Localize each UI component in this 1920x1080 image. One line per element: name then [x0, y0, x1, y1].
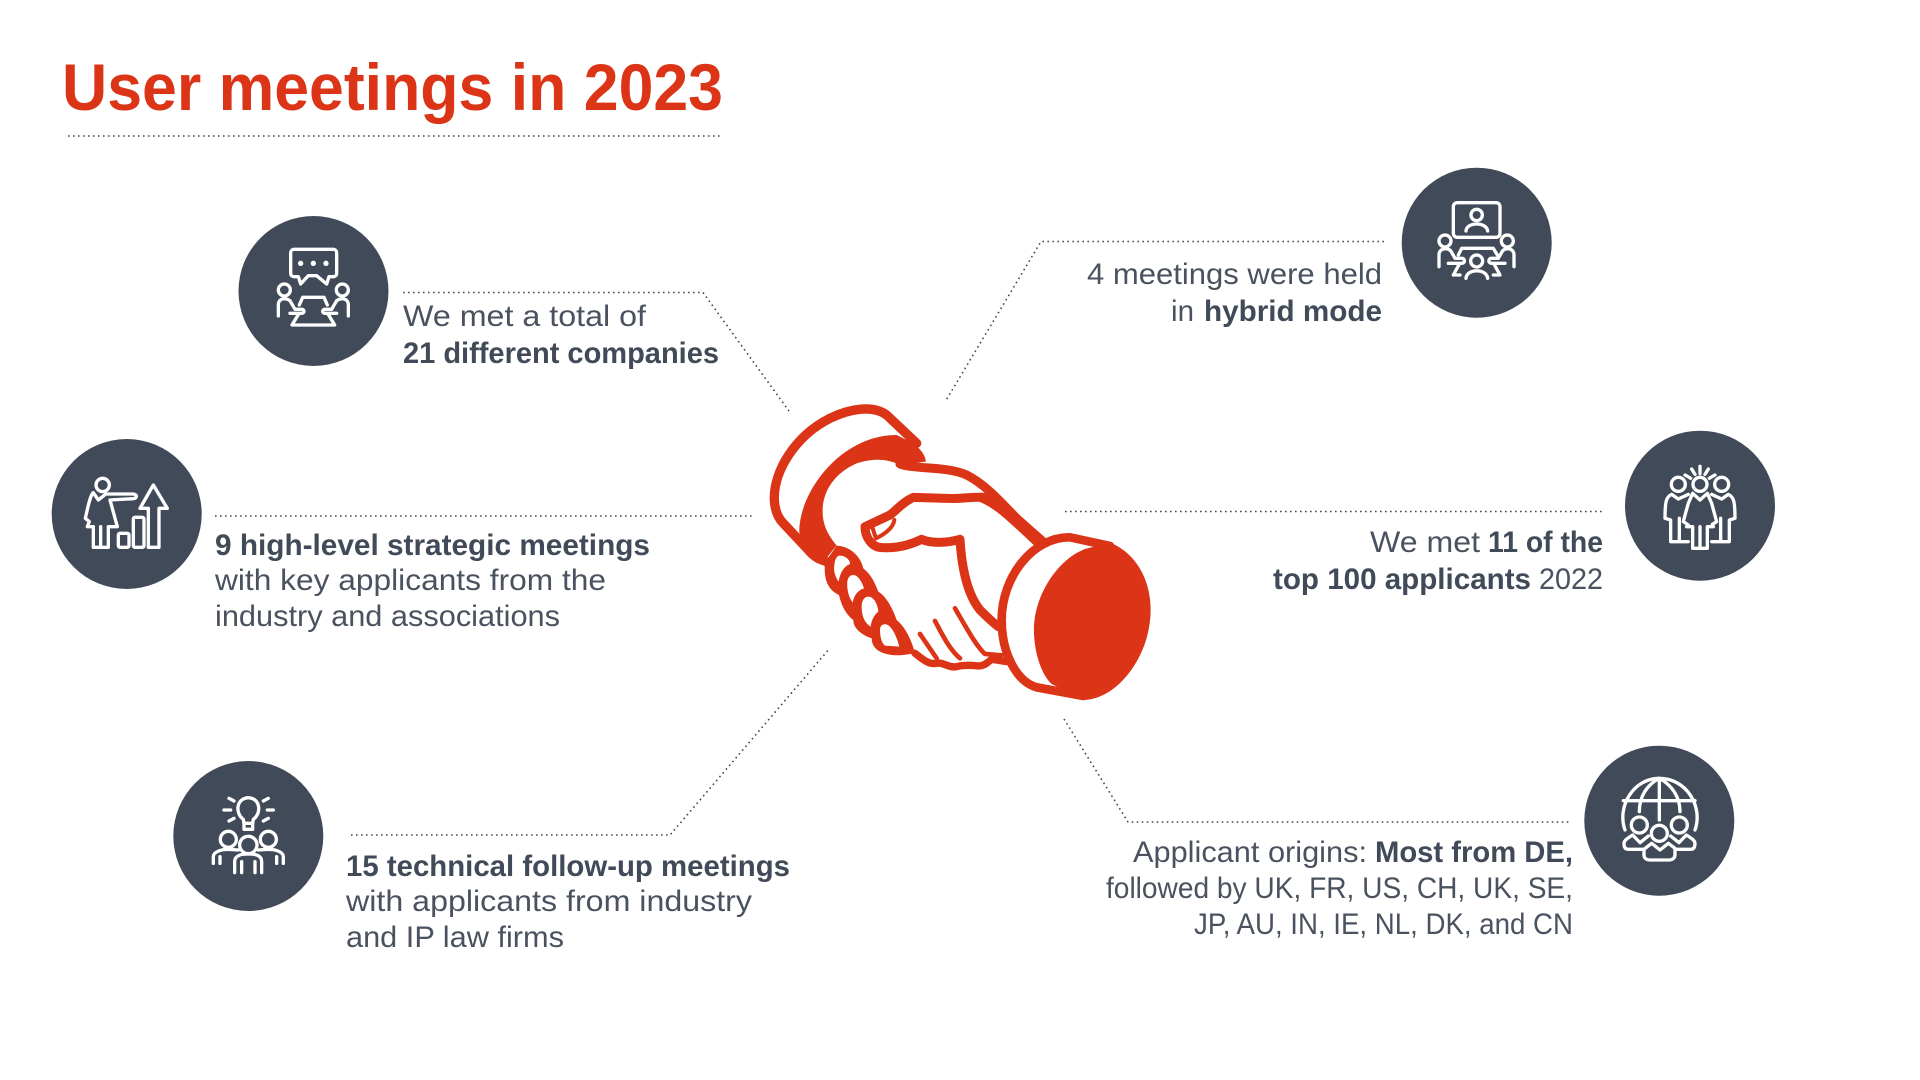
panel: hybrid mode	[1087, 168, 1552, 328]
text: top applicants	[1273, 526, 1603, 596]
text: technical meetings: and IP law firms	[346, 921, 564, 954]
icon: presenter with growth chart	[52, 439, 202, 589]
text: strategic meetings: with key applicants from the	[214, 564, 606, 597]
text: hybrid mode	[1087, 258, 1382, 328]
connector: strategic meetings	[215, 515, 753, 517]
text: technical meetings: with applicants from industry	[345, 885, 752, 918]
text: hybrid mode: hybrid mode	[1204, 295, 1382, 328]
text: strategic meetings: industry and associations	[215, 600, 560, 633]
text: applicant origins: Most from DE,	[1375, 836, 1573, 869]
text: total companies: We met a total of	[403, 300, 647, 333]
panel: top applicants	[1273, 431, 1775, 596]
connector: hybrid mode	[945, 242, 1384, 402]
title: User meetings in 2023	[62, 50, 723, 124]
text: total companies: 21 different companies	[403, 337, 719, 370]
text: hybrid mode: in	[1171, 295, 1194, 328]
icon: video conference	[1402, 168, 1552, 318]
icon: handshake	[774, 409, 1151, 700]
text: hybrid mode: 4 meetings were held	[1087, 258, 1382, 291]
text: applicant origins: followed by UK, FR, US, CH, UK, SE,	[1106, 872, 1573, 905]
icon: team with light bulb	[173, 761, 323, 911]
connector: companies	[403, 292, 789, 411]
panel: strategic meetings	[52, 439, 650, 633]
icon: group of three people	[1625, 431, 1775, 581]
text: total companies	[403, 300, 719, 370]
text: top applicants: 11 of the	[1488, 526, 1603, 559]
icon: meeting with speech bubble	[238, 216, 388, 366]
text: applicant origins: Applicant origins:	[1133, 836, 1367, 869]
connector: top applicants	[1065, 510, 1604, 512]
connector: technical meetings	[351, 648, 830, 835]
text: technical meetings: 15 technical follow-up meetings	[346, 850, 790, 883]
text: top applicants: We met	[1370, 526, 1481, 559]
title underline	[68, 135, 721, 137]
text: applicant origins: JP, AU, IN, IE, NL, DK, and CN	[1194, 908, 1573, 941]
text: technical meetings	[345, 850, 790, 954]
text: top applicants: 2022	[1539, 563, 1603, 596]
panel: companies	[238, 216, 719, 370]
panel: applicant origins	[1106, 746, 1734, 941]
text: applicant origins	[1106, 836, 1573, 941]
icon: globe with people	[1584, 746, 1734, 896]
text: top applicants: top 100 applicants	[1273, 563, 1531, 596]
text: strategic meetings: 9 high-level strategic meetings	[215, 529, 650, 562]
panel: technical meetings	[173, 761, 790, 954]
connector: applicant origins	[1064, 719, 1570, 822]
text: strategic meetings	[214, 529, 650, 633]
